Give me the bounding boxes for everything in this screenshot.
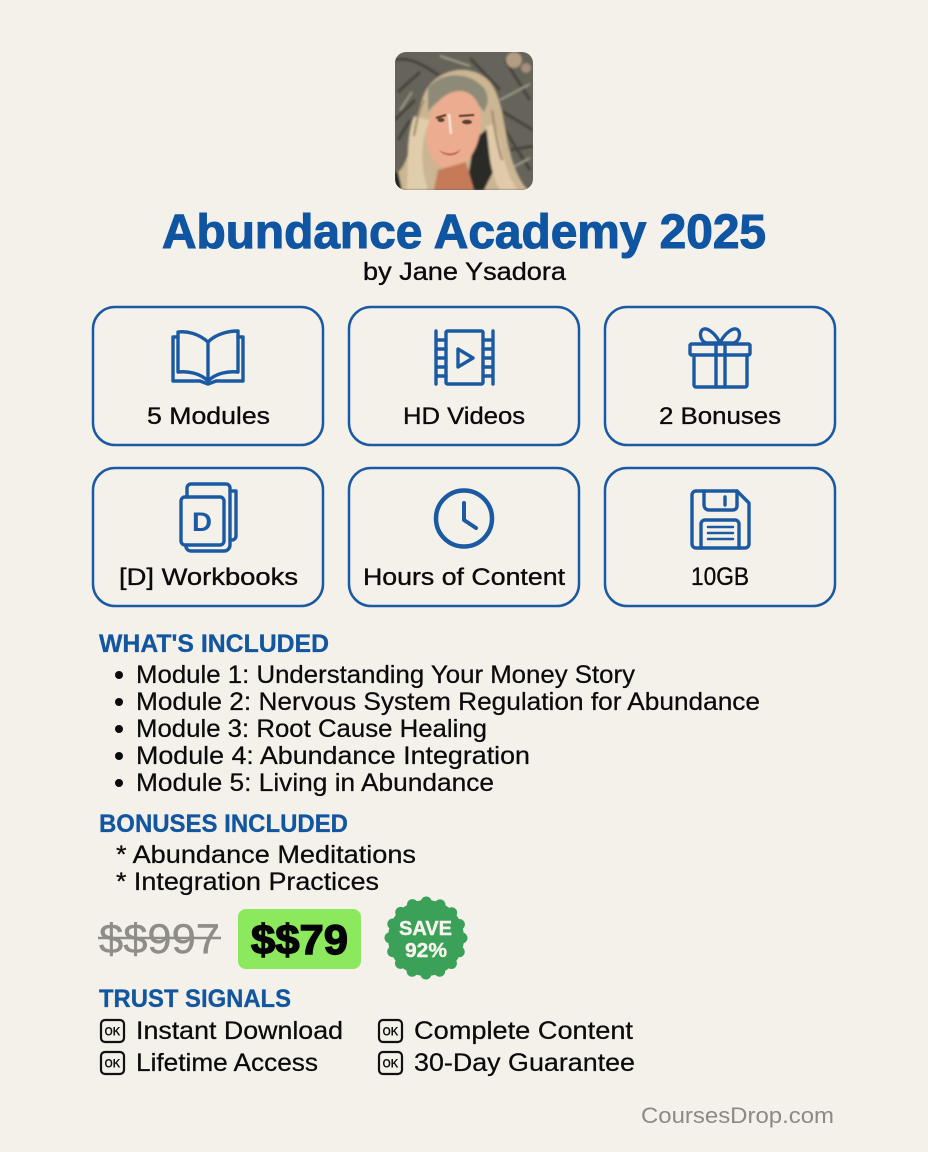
original price: $$997 xyxy=(99,915,220,962)
card: Workbooks xyxy=(93,468,323,606)
trust item: instant download: Instant Download xyxy=(136,1017,343,1045)
card: HD Videos xyxy=(349,307,579,445)
module list xyxy=(115,661,760,797)
card: 2 Bonuses: 2 Bonuses xyxy=(659,403,781,430)
heading: what's included: WHAT'S INCLUDED xyxy=(99,630,329,658)
card: Hours of Content xyxy=(349,468,579,606)
module list: Module 5: Living in Abundance xyxy=(136,769,494,797)
icon: gift box xyxy=(690,329,750,387)
bonus list xyxy=(116,841,416,896)
card: HD Videos: HD Videos xyxy=(403,403,525,430)
trust item: 30-day guarantee: OK xyxy=(382,1056,399,1070)
trust item: instant download: OK xyxy=(104,1024,121,1038)
trust item: complete content: Complete Content xyxy=(414,1017,633,1045)
icon: clock xyxy=(436,490,492,546)
card: 2 Bonuses xyxy=(605,307,835,445)
card: Hours of Content: Hours of Content xyxy=(363,564,565,591)
portrait photo xyxy=(395,52,533,190)
heading: trust signals: TRUST SIGNALS xyxy=(99,985,291,1013)
title: Abundance Academy 2025 xyxy=(162,206,766,259)
icon: floppy disk xyxy=(692,491,749,548)
trust item: lifetime access: Lifetime Access xyxy=(136,1049,318,1077)
card: 10GB: 10GB xyxy=(691,563,749,591)
icon: stacked workbooks xyxy=(181,484,236,551)
icon: open book xyxy=(173,331,243,384)
module list: Module 4: Abundance Integration xyxy=(136,742,530,770)
module list: Module 1: Understanding Your Money Story xyxy=(136,661,636,689)
card: 10GB xyxy=(605,468,835,606)
module list: Module 3: Root Cause Healing xyxy=(136,715,487,743)
section: trust signals xyxy=(99,985,635,1077)
icon: film strip with play button xyxy=(436,331,493,384)
subtitle: by Jane Ysadora xyxy=(363,258,566,286)
bonus list: * Integration Practices xyxy=(116,868,379,896)
card: 5 Modules: 5 Modules xyxy=(147,403,270,430)
sale price: $$79 xyxy=(251,916,348,963)
trust item: 30-day guarantee: 30-Day Guarantee xyxy=(414,1049,635,1077)
sale price xyxy=(238,909,361,969)
section: what's included xyxy=(99,630,760,797)
trust item: lifetime access: OK xyxy=(104,1056,121,1070)
heading: bonuses included: BONUSES INCLUDED xyxy=(99,810,348,838)
module list: Module 2: Nervous System Regulation for Abundance xyxy=(136,688,760,716)
badge: save 92%: SAVE xyxy=(399,918,452,940)
card: Workbooks: [D] Workbooks xyxy=(119,564,298,591)
trust item: complete content: OK xyxy=(382,1024,399,1038)
section: bonuses included xyxy=(99,810,416,896)
card: 5 Modules xyxy=(93,307,323,445)
badge: save 92%: 92% xyxy=(405,940,447,962)
icon: stacked workbooks: D xyxy=(192,507,212,537)
bonus list: * Abundance Meditations xyxy=(116,841,416,869)
badge: save 92% xyxy=(388,900,464,976)
footer watermark: CoursesDrop.com xyxy=(641,1103,834,1128)
